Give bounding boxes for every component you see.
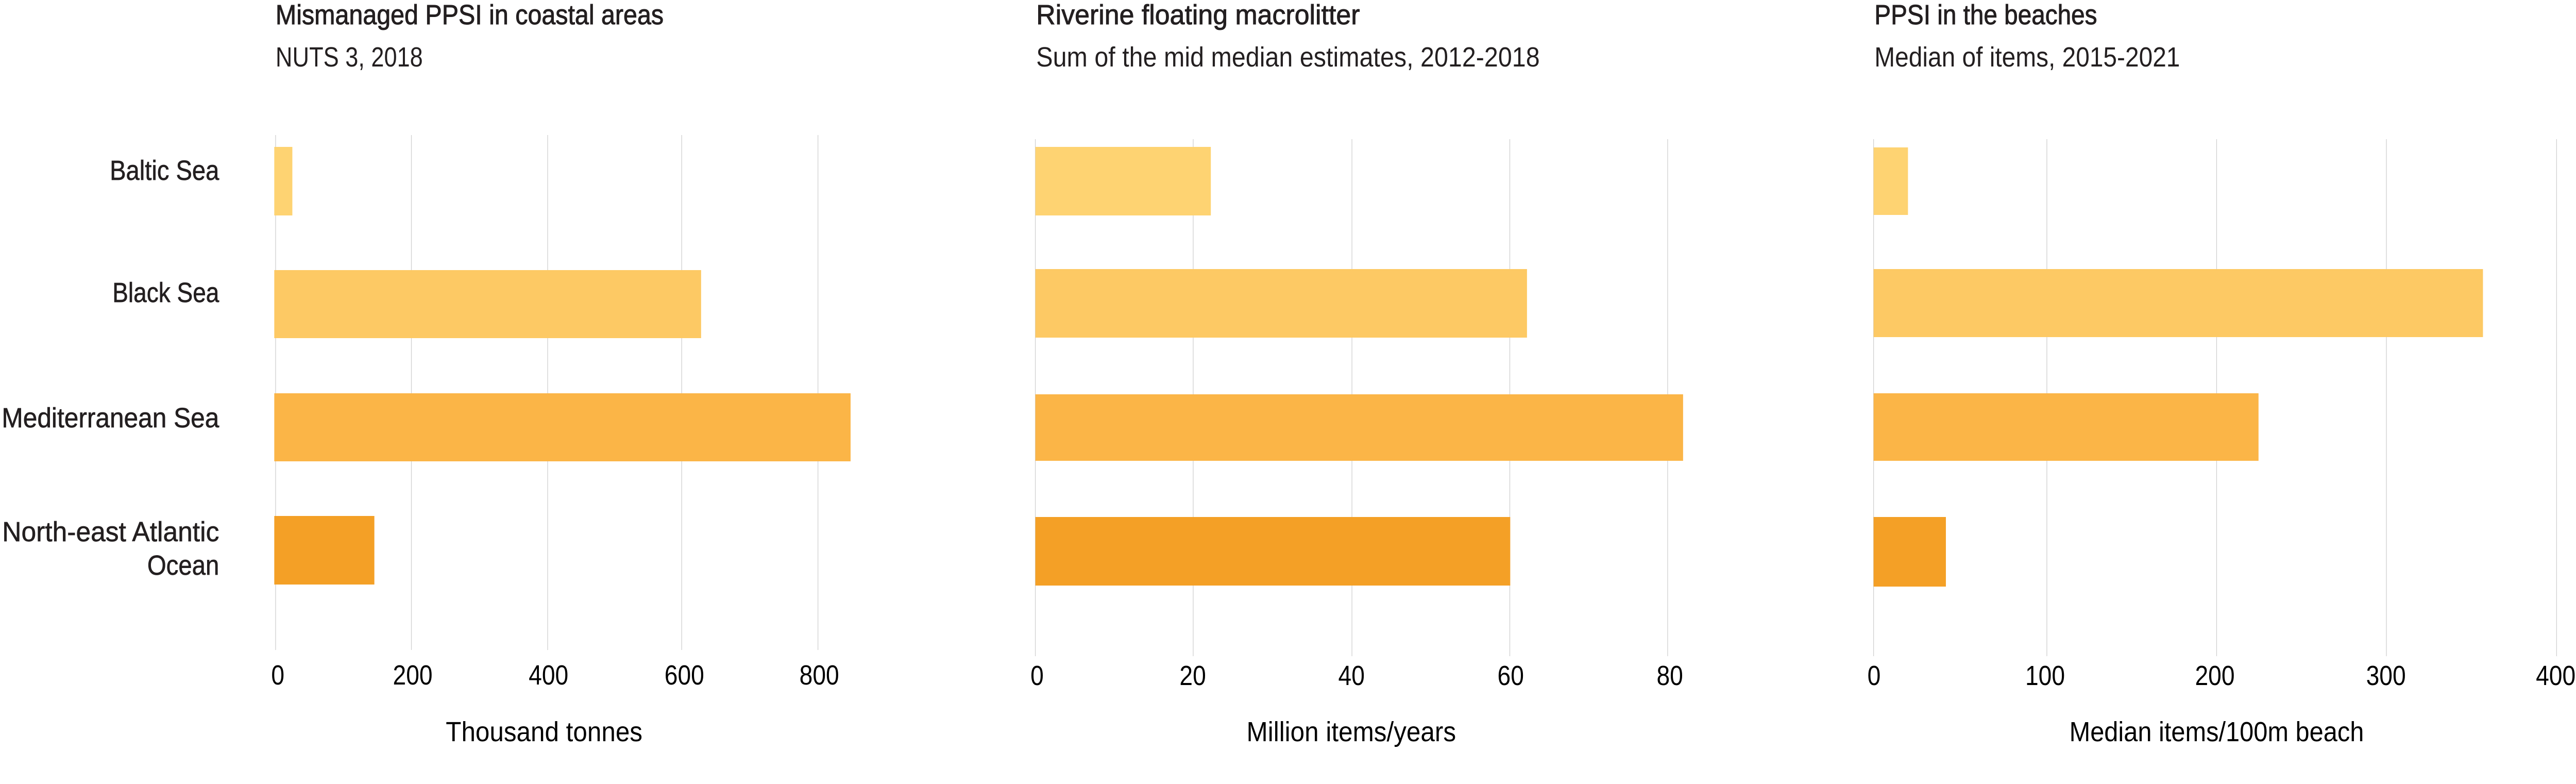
x-axis tick labels: chart 3: 300 xyxy=(2366,660,2406,691)
x-axis title: Million items/years: Million items/years xyxy=(1247,716,1456,747)
text: chart 2 subtitle: Sum of the mid median estimates, 2012-2018 xyxy=(1036,42,1540,73)
bar chart: chart 1 bars xyxy=(274,147,851,585)
x-axis tick labels: chart 1: 800 xyxy=(800,660,839,691)
text: chart 3 subtitle: Median of items, 2015-2021 xyxy=(1874,42,2180,73)
x-axis tick labels: chart 3 xyxy=(1868,660,2575,691)
label: Mediterranean Sea: Mediterranean Sea xyxy=(2,403,219,433)
x-axis tick labels: chart 1: 0 xyxy=(271,660,284,691)
heading: chart 1 title: Mismanaged PPSI in coastal areas xyxy=(276,0,664,30)
panel: PPSI in the beaches xyxy=(1868,0,2575,747)
x-axis tick labels: chart 2 xyxy=(1030,660,1683,691)
label: Black Sea: Black Sea xyxy=(112,277,219,308)
x-axis tick labels: chart 1 xyxy=(271,660,839,691)
x-axis tick labels: chart 2: 40 xyxy=(1338,660,1365,691)
x-axis tick labels: chart 2: 0 xyxy=(1030,660,1044,691)
label: Baltic Sea: Baltic Sea xyxy=(110,155,219,186)
bar chart: chart 2 bars xyxy=(1036,147,1683,586)
x-axis tick labels: chart 2: 80 xyxy=(1656,660,1683,691)
x-axis tick labels: chart 2: 20 xyxy=(1179,660,1206,691)
x-axis title: Thousand tonnes: Thousand tonnes xyxy=(446,716,642,747)
x-axis tick labels: chart 3: 200 xyxy=(2195,660,2235,691)
label: North-east Atlantic Ocean: Ocean xyxy=(147,550,219,581)
label: North-east Atlantic Ocean xyxy=(2,516,219,581)
heading: chart 2 title: Riverine floating macrolitter xyxy=(1036,0,1360,30)
label: North-east Atlantic Ocean: North-east Atlantic xyxy=(2,516,219,547)
x-axis tick labels: chart 3: 0 xyxy=(1868,660,1880,691)
x-axis tick labels: chart 3: 100 xyxy=(2025,660,2065,691)
y-axis category labels xyxy=(2,155,219,581)
heading: chart 3 title: PPSI in the beaches xyxy=(1874,0,2097,30)
panel: mismanaged PPSI in coastal areas xyxy=(271,0,851,747)
x-axis tick labels: chart 1: 200 xyxy=(393,660,433,691)
x-axis tick labels: chart 3: 400 xyxy=(2536,660,2575,691)
x-axis title: Median items/100m beach: Median items/100m beach xyxy=(2070,716,2364,747)
x-axis tick labels: chart 1: 600 xyxy=(665,660,704,691)
bar chart: chart 3 bars xyxy=(1874,147,2483,587)
text: chart 1 subtitle: NUTS 3, 2018 xyxy=(276,42,423,73)
x-axis tick labels: chart 1: 400 xyxy=(529,660,568,691)
panel: riverine floating macrolitter xyxy=(1030,0,1683,747)
x-axis tick labels: chart 2: 60 xyxy=(1498,660,1524,691)
